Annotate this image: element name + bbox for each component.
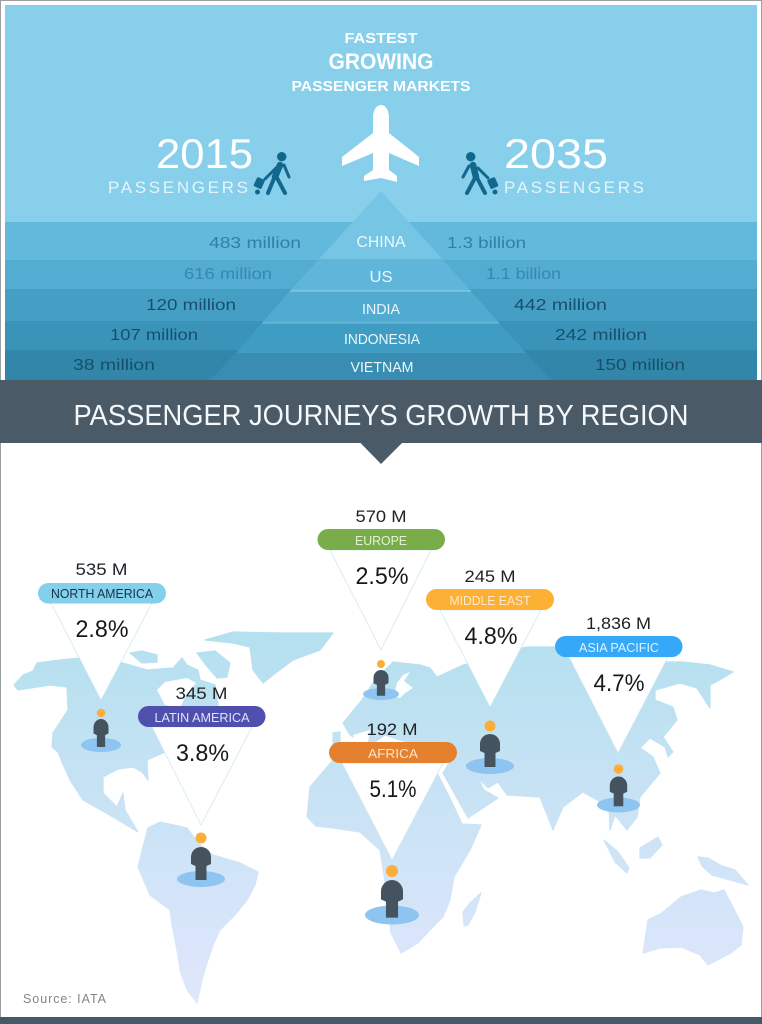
callout: Africa: 5.1% xyxy=(370,776,416,803)
callout: North America: 535 M xyxy=(76,560,128,579)
footer bar xyxy=(0,1017,762,1024)
row: China xyxy=(209,234,526,252)
row: China: 483 million xyxy=(209,235,301,252)
water: Hudson Bay xyxy=(157,678,196,708)
callout: Asia Pacific: ASIA PACIFIC xyxy=(579,641,659,655)
pyramid xyxy=(210,191,551,380)
callout: Asia Pacific: 4.7% xyxy=(594,670,644,697)
row: China: CHINA xyxy=(356,234,406,251)
row: Indonesia: 242 million xyxy=(555,327,647,344)
icon: person Middle East xyxy=(466,720,514,774)
icon: person Asia Pacific xyxy=(597,764,640,812)
row: India: 120 million xyxy=(146,297,236,314)
callout: Europe: EUROPE xyxy=(355,534,407,548)
callout: Middle East: MIDDLE EAST xyxy=(450,594,531,608)
callout: Africa: AFRICA xyxy=(368,747,419,761)
icon: person Africa xyxy=(365,865,419,924)
callout: Asia Pacific xyxy=(555,614,682,753)
row: Vietnam: VIETNAM xyxy=(350,359,414,376)
title: PASSENGER MARKETS xyxy=(292,78,470,95)
icon: traveller right xyxy=(463,152,499,194)
callout: Asia Pacific: 1,836 M xyxy=(586,614,651,633)
row: India: 442 million xyxy=(514,297,607,314)
callout: Europe: 2.5% xyxy=(356,563,408,590)
water: Mediterranean Sea xyxy=(353,730,370,742)
heading: 2035 passengers xyxy=(504,130,644,197)
row: Vietnam: 38 million xyxy=(73,357,155,374)
heading: 2015 passengers: 2015 xyxy=(156,130,253,177)
title: FASTEST xyxy=(344,30,418,47)
callout: Africa: 192 M xyxy=(366,720,418,739)
row: US: US xyxy=(370,269,392,286)
callout: North America: NORTH AMERICA xyxy=(51,587,154,601)
world map xyxy=(14,632,748,1003)
callout: Europe: 570 M xyxy=(356,507,406,526)
row: India: INDIA xyxy=(362,301,400,318)
heading: 2015 passengers xyxy=(108,130,253,197)
row: US: 616 million xyxy=(184,266,272,283)
row: Vietnam: 150 million xyxy=(595,357,685,374)
row: Indonesia xyxy=(110,327,647,348)
panel: fastest growing passenger markets xyxy=(5,5,757,380)
callout: Latin America xyxy=(138,684,266,825)
callout: Africa xyxy=(329,720,457,860)
callout: Europe xyxy=(318,507,445,650)
heading: 2015 passengers: PASSENGERS xyxy=(108,178,248,197)
water: Baltic Sea xyxy=(394,672,413,698)
row: Indonesia: 107 million xyxy=(110,327,198,344)
heading: 2035 passengers: PASSENGERS xyxy=(504,178,644,197)
icon: traveller left xyxy=(253,152,289,194)
callout: Latin America: 3.8% xyxy=(176,740,229,767)
row: China: 1.3 billion xyxy=(447,235,526,252)
icon: person Europe xyxy=(363,660,399,700)
row: Vietnam xyxy=(73,357,685,376)
source note: Source: IATA xyxy=(23,992,107,1006)
callout: Middle East: 4.8% xyxy=(464,623,518,650)
callout: Middle East: 245 M xyxy=(464,567,516,586)
row: Indonesia: INDONESIA xyxy=(344,331,420,348)
callout: Latin America: 345 M xyxy=(176,684,228,703)
banner: passenger journeys growth by region: PASSENGER JOURNEYS GROWTH BY REGION xyxy=(74,400,688,432)
icon: person North America xyxy=(81,709,121,752)
icon: airplane xyxy=(342,105,419,182)
title: GROWING xyxy=(328,49,434,74)
callout: North America xyxy=(38,560,166,700)
heading: 2035 passengers: 2035 xyxy=(504,130,608,177)
callout: North America: 2.8% xyxy=(76,616,128,643)
row: India xyxy=(146,297,607,318)
callout: Middle East xyxy=(426,567,554,707)
title xyxy=(292,30,470,95)
icon: person Latin America xyxy=(177,832,225,887)
row: US: 1.1 billion xyxy=(486,266,561,283)
callout: Latin America: LATIN AMERICA xyxy=(154,711,250,725)
row: US xyxy=(184,266,561,286)
banner: passenger journeys growth by region xyxy=(0,380,762,464)
